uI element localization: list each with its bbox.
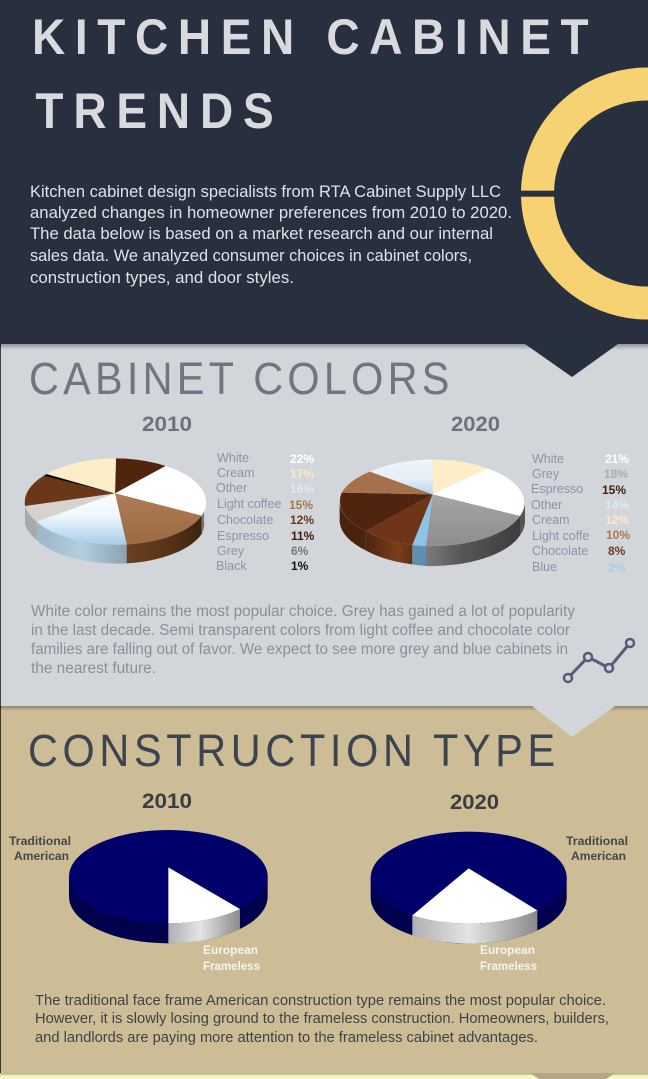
heading: cabinet colors: CABINET COLORS — [29, 354, 449, 404]
legend: colors 2020: 8% — [608, 544, 626, 558]
pie chart: construction 2020 — [371, 832, 567, 944]
pie chart: colors 2020 — [340, 459, 525, 566]
label: traditional american 2020: American — [571, 849, 626, 863]
legend: colors 2020: 12% — [605, 513, 629, 527]
legend: colors 2010 — [216, 451, 315, 573]
text block: construction commentary: and landlords are paying more attention to the frameless cabinet advantages. — [35, 1030, 538, 1046]
legend: colors 2010: White — [217, 451, 249, 465]
label: european frameless 2010 — [203, 943, 260, 973]
icon: colors pointer triangle — [532, 706, 615, 737]
legend: colors 2010: Espresso — [217, 529, 269, 543]
legend: colors 2020: 18% — [604, 467, 628, 481]
label: traditional american 2020 — [566, 834, 628, 863]
text block: introduction: construction types, and door styles. — [30, 269, 294, 287]
legend: colors 2020: 2% — [608, 561, 626, 575]
label: traditional american 2010: American — [14, 849, 69, 863]
icon: construction pointer triangle — [530, 1073, 615, 1079]
label: european frameless 2010: European — [203, 943, 258, 957]
pie chart: colors 2010 — [25, 458, 206, 564]
legend: colors 2010: Grey — [217, 544, 245, 558]
title: KITCHEN CABINET — [32, 10, 589, 65]
legend: colors 2010: 16% — [290, 482, 314, 496]
legend: colors 2020: Light coffe — [532, 529, 590, 543]
text block: colors commentary: the nearest future. — [31, 660, 156, 677]
legend: colors 2010: Other — [216, 481, 247, 495]
heading: construction 2020: 2020 — [450, 791, 499, 814]
legend: colors 2010: Cream — [217, 466, 255, 480]
heading: construction 2010: 2010 — [142, 790, 192, 813]
legend: colors 2010: 22% — [290, 452, 314, 466]
label: european frameless 2010: Frameless — [203, 959, 260, 973]
text block: introduction: sales data. We analyzed consumer choices in cabinet colors, — [30, 247, 472, 265]
text block: colors commentary: in the last decade. Semi transparent colors from light coffee and chocolate color — [31, 622, 570, 639]
label: traditional american 2020: Traditional — [566, 834, 628, 848]
legend: colors 2010: 6% — [291, 544, 309, 558]
text block: colors commentary — [31, 603, 575, 677]
text block: construction commentary — [35, 993, 609, 1046]
text block: construction commentary: However, it is slowly losing ground to the frameless construction. Homeowners, builders, — [35, 1011, 609, 1027]
text block: construction commentary: The traditional face frame American construction type remains the most popular choice. — [35, 993, 606, 1009]
icon: trend line — [564, 639, 634, 682]
title: TRENDS — [35, 84, 274, 139]
text block: introduction: The data below is based on a market research and our internal — [30, 225, 493, 243]
legend: colors 2010: 1% — [291, 559, 309, 573]
label: european frameless 2020: Frameless — [480, 959, 537, 973]
label: traditional american 2010 — [9, 834, 71, 863]
text block: introduction — [30, 183, 512, 287]
legend: colors 2020: 21% — [605, 452, 629, 466]
legend: colors 2010: 12% — [290, 513, 314, 527]
legend: colors 2020: 10% — [606, 528, 630, 542]
legend: colors 2020: Cream — [532, 513, 570, 527]
label: traditional american 2010: Traditional — [9, 834, 71, 848]
legend: colors 2010: 15% — [289, 498, 313, 512]
panel: cabinet colors background — [0, 344, 648, 706]
legend: colors 2020: White — [532, 452, 564, 466]
legend: colors 2010: Black — [216, 559, 247, 573]
legend: colors 2020: Other — [531, 498, 562, 512]
legend: colors 2020: Chocolate — [532, 544, 588, 558]
legend: colors 2010: 17% — [290, 467, 314, 481]
panel: next section strip — [0, 1073, 648, 1079]
legend: colors 2020: Espresso — [531, 482, 583, 496]
legend: colors 2020: 14% — [605, 498, 629, 512]
legend: colors 2010: Chocolate — [217, 513, 273, 527]
pie chart: construction 2010 — [69, 830, 268, 943]
legend: colors 2010: Light coffee — [217, 497, 281, 511]
title — [32, 10, 589, 139]
text block: colors commentary: families are falling out of favor. We expect to see more grey and blue cabinets in — [31, 641, 568, 658]
text block: colors commentary: White color remains the most popular choice. Grey has gained a lot of popularity — [31, 603, 575, 620]
heading: colors 2020: 2020 — [451, 413, 500, 436]
heading: construction type: CONSTRUCTION TYPE — [28, 726, 555, 776]
panel: header background — [0, 0, 648, 344]
icon: header pointer triangle — [525, 344, 618, 377]
legend: colors 2020 — [531, 452, 630, 575]
legend: colors 2010: 11% — [291, 529, 315, 543]
panel: construction type background — [0, 706, 648, 1073]
text block: introduction: analyzed changes in homeowner preferences from 2010 to 2020. — [30, 204, 512, 222]
legend: colors 2020: Grey — [532, 467, 560, 481]
text block: introduction: Kitchen cabinet design specialists from RTA Cabinet Supply LLC — [30, 183, 501, 201]
heading: colors 2010: 2010 — [142, 413, 192, 436]
label: european frameless 2020: European — [480, 943, 535, 957]
label: european frameless 2020 — [480, 943, 537, 973]
legend: colors 2020: 15% — [602, 483, 626, 497]
legend: colors 2020: Blue — [532, 560, 557, 574]
icon: yellow ring — [515, 84, 648, 303]
